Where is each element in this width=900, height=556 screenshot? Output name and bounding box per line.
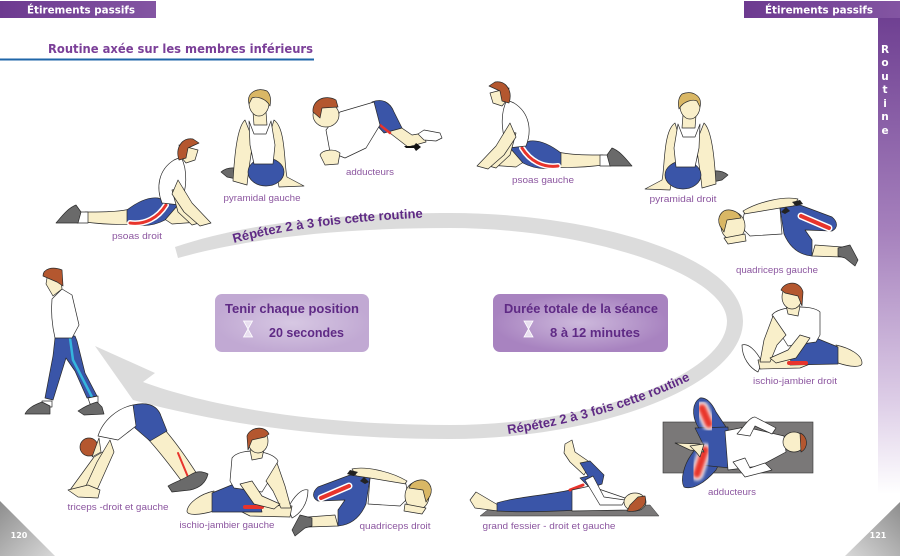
- figure: quadriceps gauche: [719, 198, 858, 266]
- figure: standing: [25, 268, 104, 415]
- sidebar: Routine: n: [881, 111, 889, 123]
- header tab right: [744, 1, 900, 18]
- sidebar: Routine: o: [881, 57, 889, 69]
- figure: triceps: [68, 404, 208, 498]
- header tab right: Étirements passifs: [765, 4, 873, 16]
- page corner left: [0, 501, 55, 556]
- label: pyramidal gauche: [224, 193, 300, 204]
- label: grand fessier - droit et gauche: [482, 521, 616, 532]
- label: psoas droit: [112, 231, 162, 242]
- sidebar: Routine: [878, 18, 900, 494]
- figure: pyramidal droit: [645, 93, 728, 190]
- figure: ischio-jambier gauche: [187, 428, 308, 518]
- figure: quadriceps droit: [292, 468, 431, 536]
- label: quadriceps gauche: [736, 265, 818, 276]
- page number: 120: [11, 531, 28, 540]
- figure: adducteurs (haut): [313, 98, 442, 165]
- sidebar: Routine: i: [883, 98, 887, 110]
- label: pyramidal droit: [650, 194, 717, 205]
- figure: adducteurs (bas, sur tapis): [663, 398, 813, 488]
- sidebar: Routine: t: [882, 84, 888, 96]
- panel: total duration: Durée totale de la séance: [504, 301, 658, 316]
- panel: total duration: 8 à 12 minutes: [550, 325, 640, 340]
- page corner right: [845, 502, 900, 556]
- circular arrow: [95, 213, 743, 439]
- label: adducteurs: [708, 487, 756, 498]
- label: ischio-jambier gauche: [180, 520, 274, 531]
- figure: pyramidal gauche: [221, 90, 304, 187]
- label: ischio-jambier droit: [753, 376, 837, 387]
- label: quadriceps droit: [360, 521, 431, 532]
- title: Routine axée sur les membres inférieurs: [48, 41, 313, 56]
- page number: 121: [870, 531, 887, 540]
- icon: hourglass: [244, 321, 252, 337]
- panel: hold time: 20 secondes: [269, 325, 344, 340]
- panel: hold time: Tenir chaque position: [225, 301, 359, 316]
- label: triceps -droit et gauche: [68, 502, 168, 513]
- header tab left: [0, 1, 156, 18]
- panel: total duration: [493, 294, 668, 352]
- arrow text top: Répétez 2 à 3 fois cette routine: [232, 209, 422, 243]
- icon: hourglass: [524, 321, 533, 337]
- panel: hold time: [215, 294, 369, 352]
- sidebar: Routine: u: [881, 71, 889, 83]
- figure: psoas gauche: [477, 82, 632, 169]
- sidebar: Routine: R: [881, 44, 889, 56]
- label: psoas gauche: [512, 175, 574, 186]
- header tab left: Étirements passifs: [27, 4, 135, 16]
- figure: grand fessier: [470, 440, 659, 516]
- figure: ischio-jambier droit: [742, 283, 862, 372]
- figure: psoas droit: [56, 139, 211, 226]
- arrow text bottom: Répétez 2 à 3 fois cette routine: [508, 374, 690, 434]
- sidebar: Routine: e: [881, 125, 889, 137]
- label: adducteurs: [346, 167, 394, 178]
